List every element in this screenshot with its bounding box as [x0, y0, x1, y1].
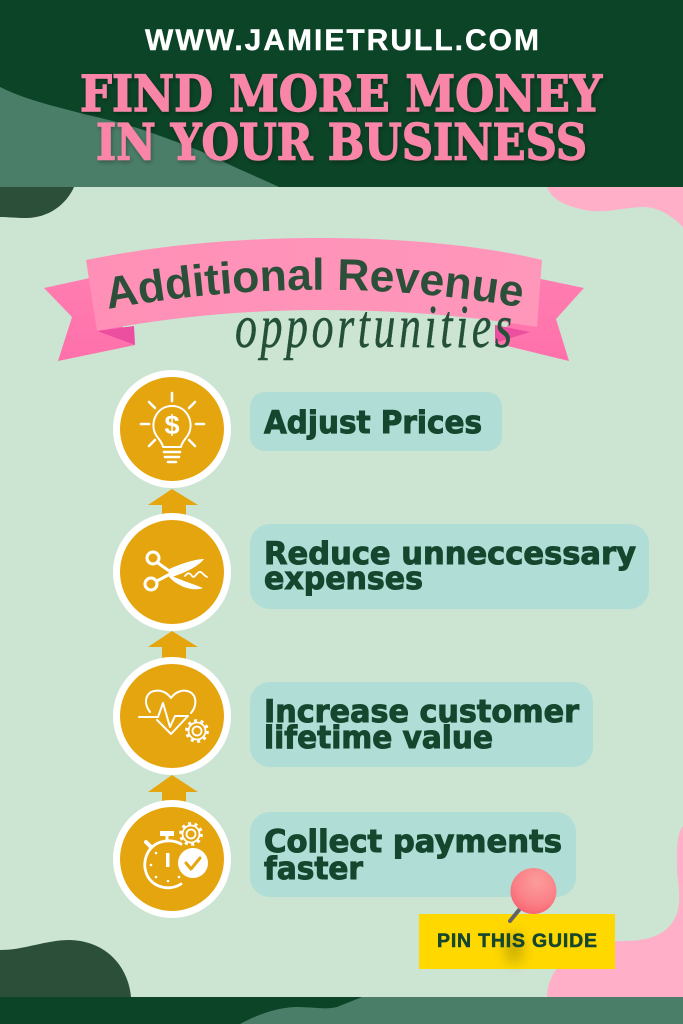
- pill: customer lifetime value: Increase customer: [264, 694, 580, 730]
- ribbon band: [86, 238, 542, 331]
- step 4 circle: [113, 800, 231, 918]
- pill: reduce expenses: Reduce unneccessary: [264, 536, 636, 572]
- icon: light bulb with dollar: $: [164, 410, 180, 440]
- title: FIND MORE MONEY: [80, 64, 603, 123]
- header band: [0, 0, 683, 187]
- decorative blob: dark top left: [0, 187, 74, 218]
- title: [80, 64, 603, 172]
- icon: heart with pulse and gear: [139, 691, 208, 742]
- ribbon heading: Additional Revenue: [109, 258, 522, 309]
- pill: adjust prices: [250, 392, 502, 451]
- pill: adjust prices: Adjust Prices: [264, 405, 482, 441]
- pill: reduce expenses: expenses: [264, 561, 423, 597]
- script subheading: opportunities: [235, 292, 512, 361]
- ribbon left fold: [97, 326, 135, 345]
- pill: customer lifetime value: lifetime value: [264, 720, 493, 756]
- footer band: [0, 997, 683, 1024]
- pill: customer lifetime value: [250, 682, 593, 767]
- pill: collect payments: faster: [264, 851, 364, 887]
- call to action: pin this guide: PIN THIS GUIDE: [437, 930, 597, 952]
- step 2 circle: [113, 513, 231, 631]
- arrow: step 2 to 1: [148, 489, 198, 516]
- call to action: pin this guide: [419, 914, 615, 969]
- pill: collect payments: [250, 812, 576, 897]
- arrow: step 4 to 3: [148, 775, 198, 803]
- pill: collect payments: Collect payments: [264, 824, 562, 860]
- ribbon right tail: [495, 279, 584, 361]
- ribbon left tail: [44, 278, 135, 361]
- arrow: step 3 to 2: [148, 631, 198, 659]
- website url: WWW.JAMIETRULL.COM: [145, 24, 539, 57]
- decorative blob: pink bottom right: [547, 826, 683, 997]
- title: IN YOUR BUSINESS: [96, 112, 587, 172]
- pill: reduce expenses: [250, 524, 649, 609]
- icon: push pin: [510, 868, 556, 921]
- decorative blob: pink top right: [547, 187, 683, 227]
- icon: stopwatch with gear and check: [145, 824, 208, 888]
- ribbon banner: [44, 238, 584, 361]
- ribbon right fold: [495, 325, 530, 343]
- decorative blob: dark bottom left: [0, 940, 131, 997]
- icon: scissors: [145, 552, 207, 590]
- step 1 circle: [113, 370, 231, 488]
- step 3 circle: [113, 657, 231, 775]
